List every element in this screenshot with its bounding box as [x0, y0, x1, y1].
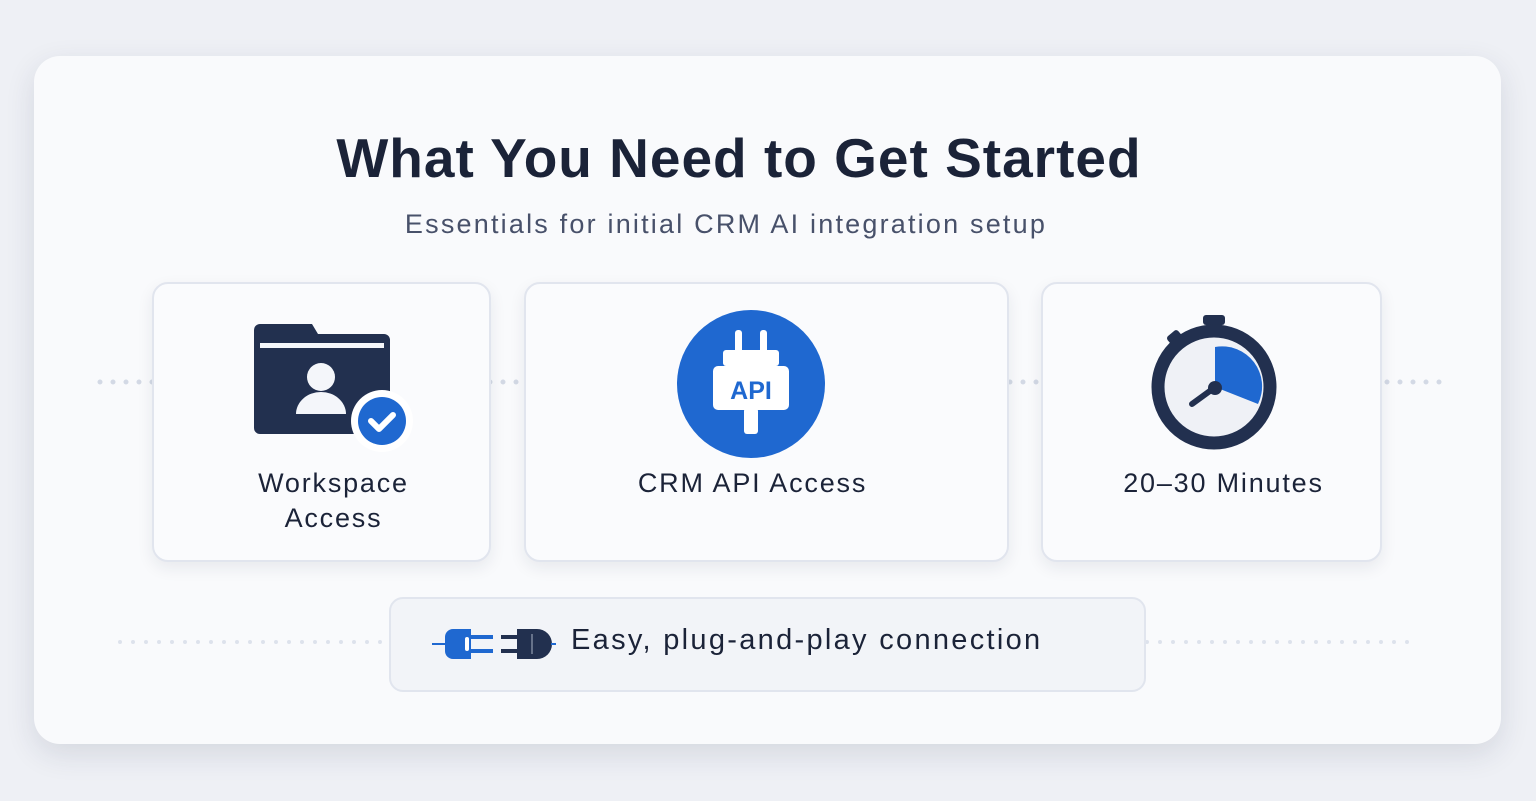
icon: api plug [677, 310, 825, 458]
text: Easy, plug-and-play connection [571, 624, 1042, 656]
title: What You Need to Get Started [336, 127, 1142, 189]
icon: stopwatch [1152, 315, 1276, 450]
label: Access [285, 503, 382, 533]
icon: plugs [432, 629, 556, 659]
subtitle: Essentials for initial CRM AI integration setup [405, 209, 1047, 239]
label: CRM API Access [638, 468, 867, 498]
label: Workspace [258, 468, 409, 498]
callout: plug-and-play [389, 597, 1146, 692]
icon: folder with user and check [254, 324, 406, 445]
label: 20–30 Minutes [1123, 468, 1324, 498]
panel: time [1041, 282, 1382, 562]
panel: workspace access [152, 282, 491, 562]
label [258, 468, 409, 533]
icon: api plug: API [730, 377, 772, 405]
panel: crm api access [524, 282, 1009, 562]
